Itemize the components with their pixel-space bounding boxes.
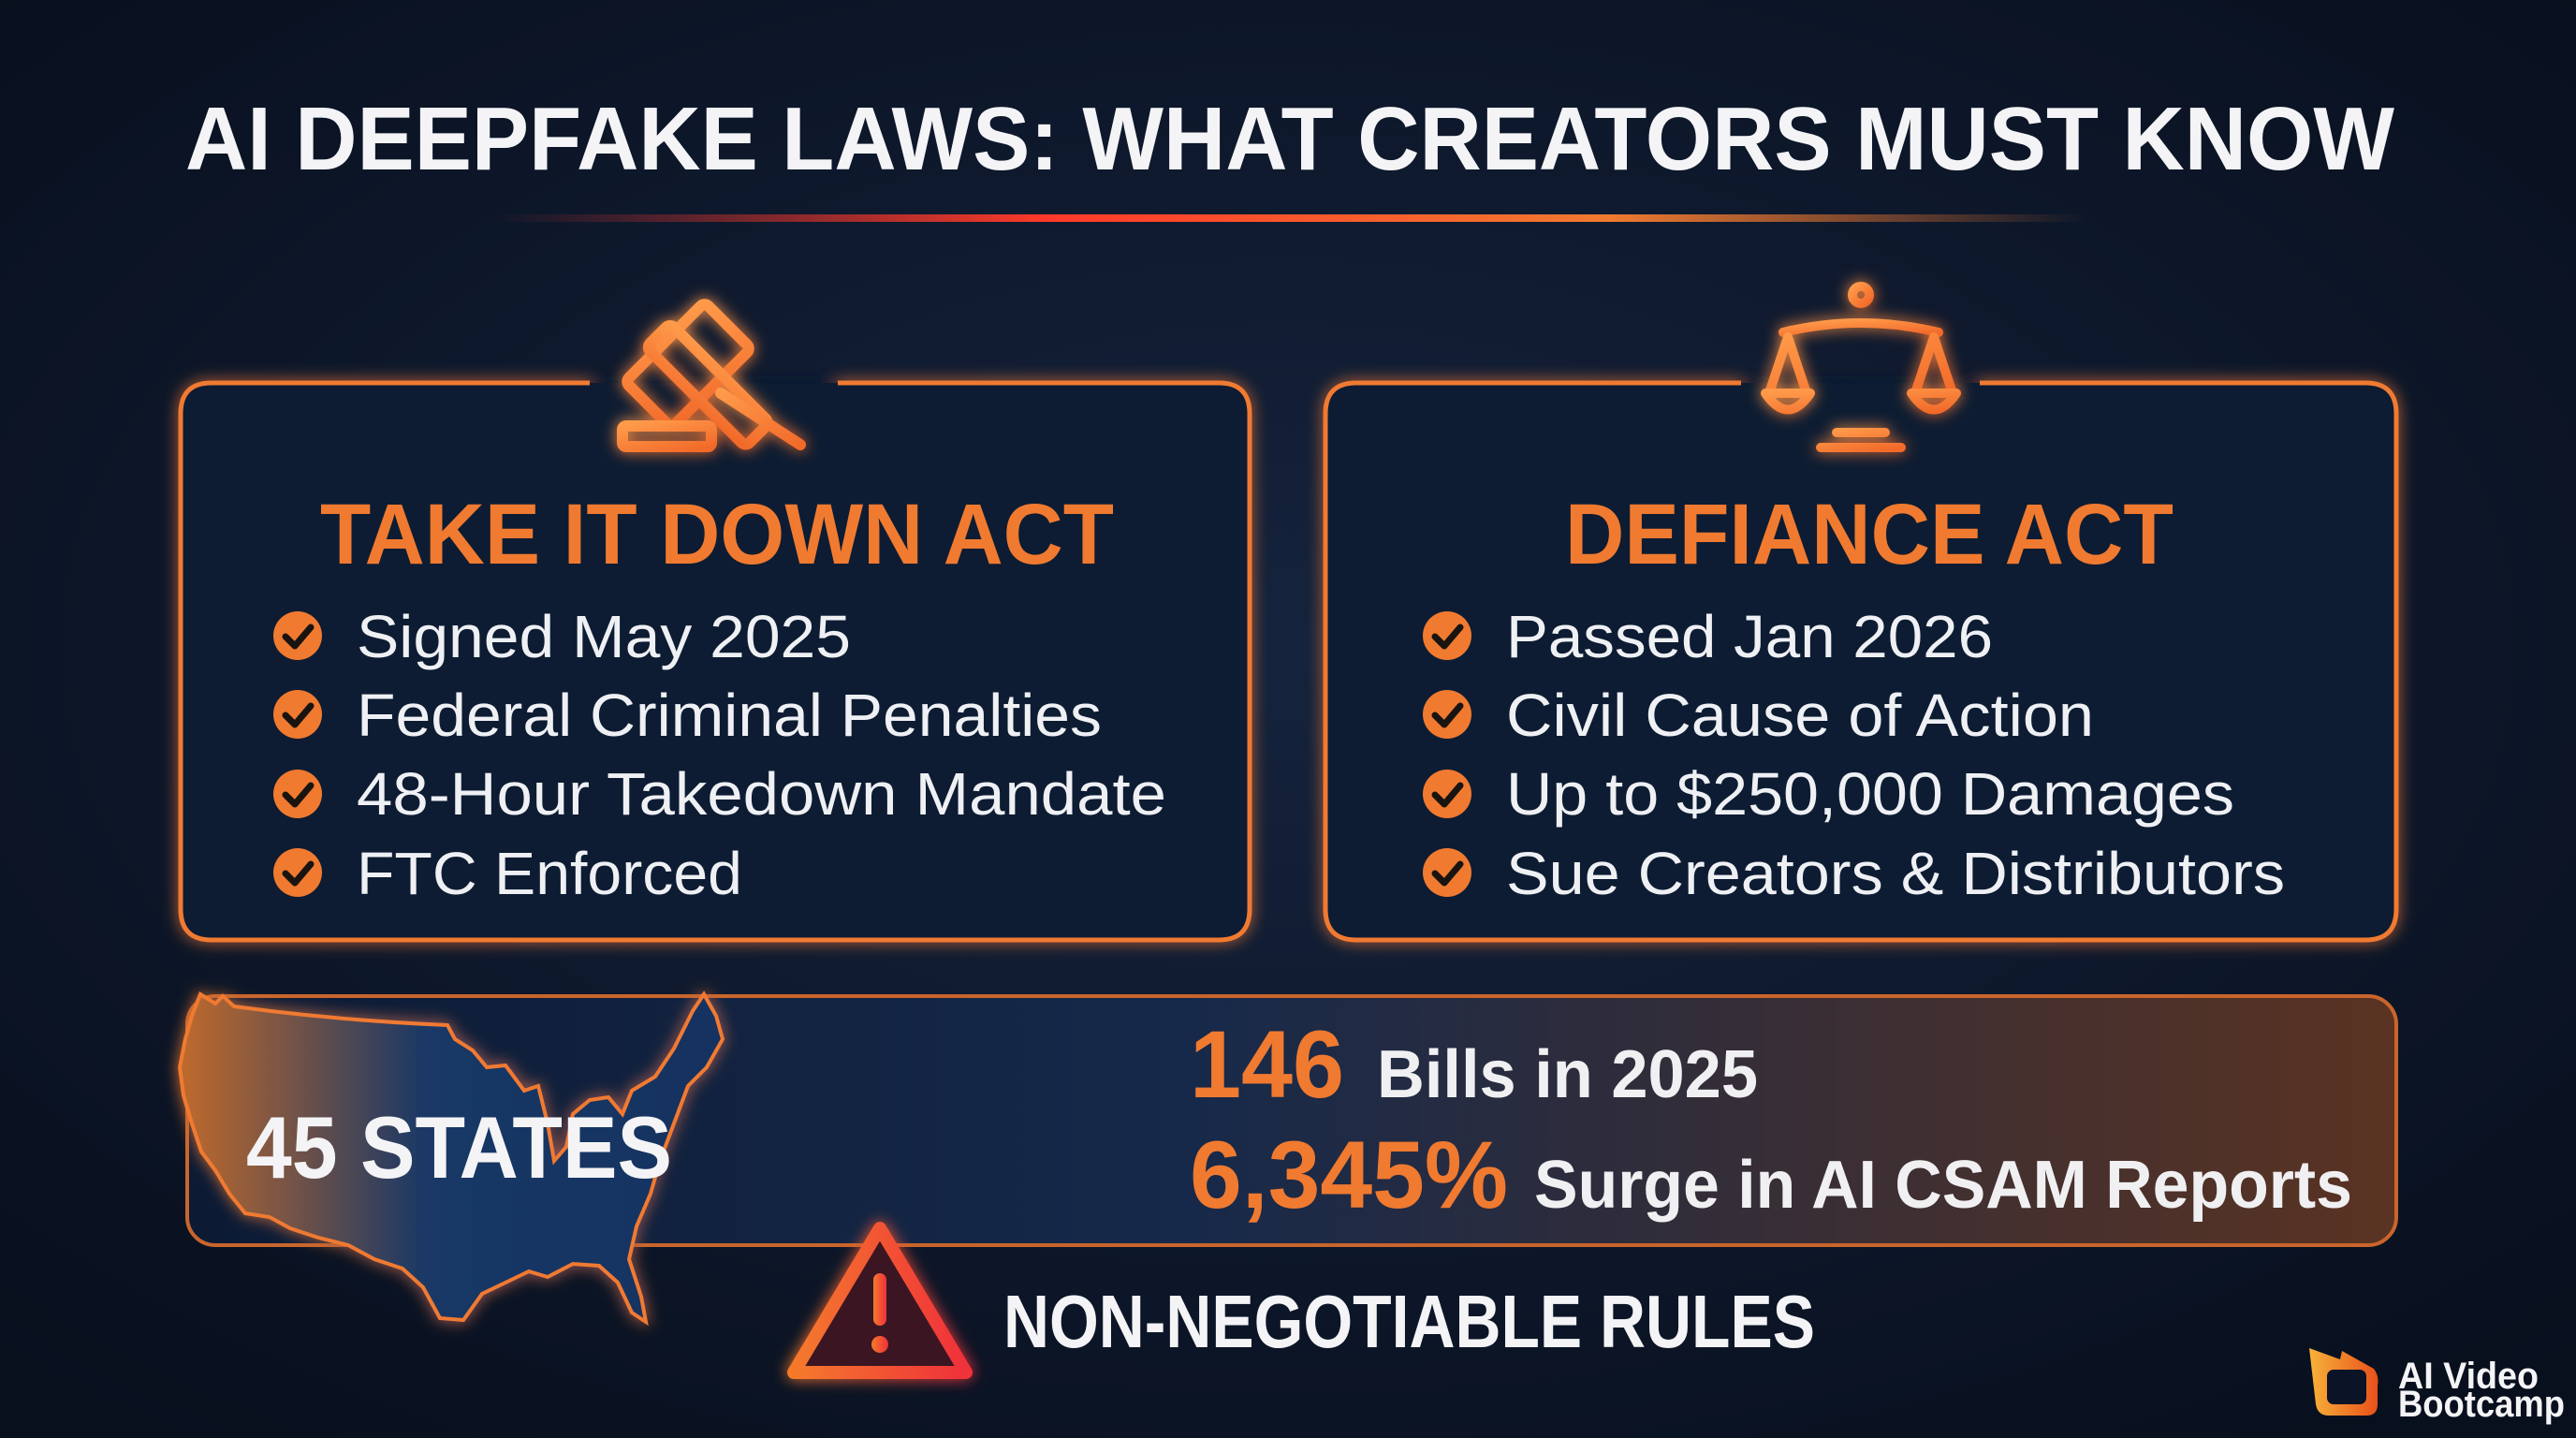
bullet list: defiance (1423, 603, 2285, 907)
bullet list: defiance: Passed Jan 2026 (1506, 603, 1993, 670)
bullet list: defiance: Up to $250,000 Damages (1506, 760, 2234, 828)
heading: defiance act: DEFIANCE ACT (1565, 487, 2174, 582)
bullet list: take it down: FTC Enforced (357, 840, 742, 907)
logo: ai video bootcamp: AI Video (2398, 1356, 2539, 1397)
icon: scales (1765, 286, 1956, 448)
bullet list: defiance: Sue Creators & Distributors (1506, 840, 2285, 907)
stat: 6345% surge (1190, 1122, 2352, 1228)
panel: take it down act (181, 302, 1250, 940)
stat: 146 bills (1190, 1011, 1758, 1118)
heading: take it down act: TAKE IT DOWN ACT (320, 487, 1114, 582)
icon: gavel (622, 302, 800, 447)
icon: warning triangle (794, 1228, 966, 1372)
bullet list: take it down: 48-Hour Takedown Mandate (357, 760, 1166, 828)
label: 45 states: 45 STATES (246, 1098, 672, 1196)
text: non-negotiable rules: NON-NEGOTIABLE RULES (1003, 1280, 1815, 1363)
stat: 6345% surge: 6,345% (1190, 1122, 1508, 1228)
title: AI DEEPFAKE LAWS: WHAT CREATORS MUST KNOW (185, 89, 2394, 189)
bullet list: take it down (273, 603, 1166, 907)
logo: ai video bootcamp: Bootcamp (2398, 1384, 2565, 1425)
bullet list: defiance: Civil Cause of Action (1506, 682, 2094, 749)
panel: statistics bar (187, 996, 2396, 1245)
stat: 146 bills: Bills in 2025 (1377, 1037, 1758, 1112)
stat: 6345% surge: Surge in AI CSAM Reports (1534, 1148, 2352, 1223)
panel: defiance act (1325, 286, 2396, 940)
stat: 146 bills: 146 (1190, 1011, 1344, 1118)
bullet list: take it down: Federal Criminal Penalties (357, 682, 1102, 749)
map: usa 45 states (180, 994, 723, 1322)
logo: ai video bootcamp (2309, 1348, 2565, 1425)
bullet list: take it down: Signed May 2025 (357, 603, 851, 670)
